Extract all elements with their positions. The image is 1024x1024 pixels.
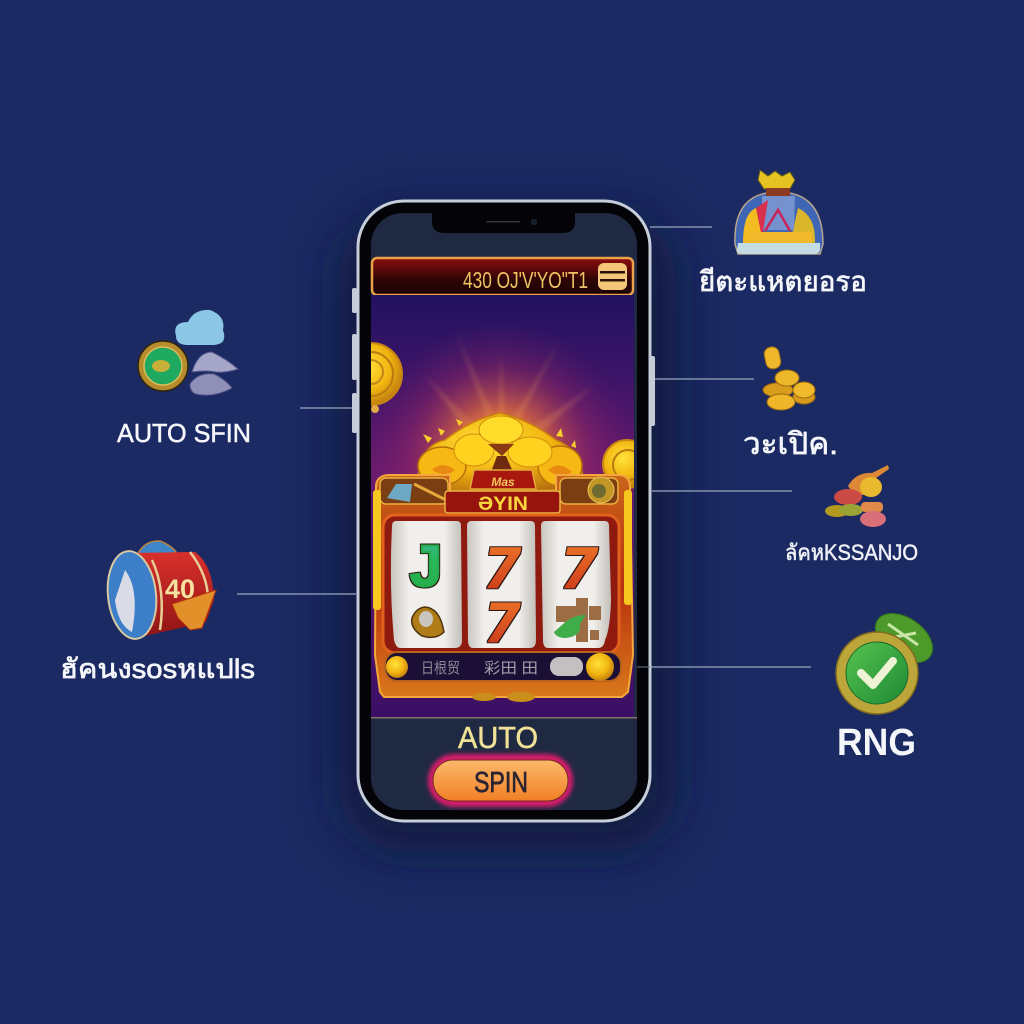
panel text right: 彩田 田	[484, 660, 538, 677]
feature: auto spin	[117, 310, 251, 448]
side buttons	[352, 288, 655, 433]
phone	[340, 201, 655, 821]
status bar text: 430 OJ'V'YO"T1	[463, 267, 588, 293]
label: วะเปิค.	[743, 428, 838, 461]
feature: coins	[743, 346, 838, 461]
seven: 7	[560, 537, 599, 602]
game area	[371, 295, 634, 717]
panel pill	[550, 657, 583, 676]
gold side trim	[373, 490, 632, 610]
light rays	[431, 344, 588, 430]
menu button	[598, 263, 627, 290]
feature: crown dome	[699, 170, 867, 297]
spin banner	[445, 491, 560, 513]
notch	[432, 210, 575, 233]
control panel	[385, 652, 621, 681]
icon: RNG check badge	[836, 603, 942, 714]
label: ยีตะแหตยอรอ	[699, 266, 867, 297]
auto label: AUTO	[458, 720, 538, 755]
crest right	[560, 477, 618, 504]
label: ลัคหKSSANJO	[785, 540, 918, 565]
speaker and camera	[486, 219, 537, 225]
connector lines	[237, 227, 811, 667]
rng connector over bezel	[637, 666, 650, 668]
base coins	[472, 692, 535, 702]
icon: red drum	[104, 541, 216, 641]
gold treasure pile	[418, 413, 583, 490]
bell symbol	[412, 607, 444, 637]
screen	[371, 213, 637, 810]
left coin	[371, 342, 403, 413]
banner lettering: Mas	[491, 475, 515, 489]
seven: 7	[483, 592, 521, 655]
icon: coin cloud and leaves	[138, 310, 238, 395]
right coin	[602, 439, 634, 489]
feature: macarons	[785, 465, 918, 565]
icon: macaron stack	[825, 465, 889, 527]
feature: RNG	[836, 603, 942, 764]
spin button	[428, 754, 573, 807]
phone body	[358, 201, 650, 821]
spin banner text: ƏYIN	[478, 494, 528, 515]
crest left	[380, 478, 448, 504]
panel coin right	[586, 653, 614, 681]
label: AUTO SFIN	[117, 418, 251, 448]
top status bar	[372, 258, 633, 295]
reel 2	[467, 521, 536, 655]
label: ฮัคนงsosหแปls	[60, 654, 255, 684]
glow	[386, 332, 614, 474]
wild symbol	[554, 598, 601, 642]
phone shadow	[340, 215, 675, 850]
spin button text: SPIN	[474, 767, 528, 799]
J symbol: J	[410, 534, 442, 599]
seven: 7	[483, 537, 522, 602]
icon: crown dome	[735, 170, 823, 254]
feature: red drum	[60, 541, 255, 684]
icon: coin stack	[763, 346, 815, 410]
reel 1	[391, 521, 462, 648]
label: RNG	[837, 722, 916, 764]
reel window	[383, 515, 619, 653]
reel 3	[541, 521, 611, 648]
upper banner	[470, 470, 536, 489]
game background	[371, 295, 634, 717]
drum number: 40	[165, 574, 195, 604]
game bottom border	[371, 717, 637, 718]
slot machine cabinet	[373, 470, 633, 702]
panel coin left	[386, 656, 408, 678]
panel text left: 日根贸	[421, 660, 460, 677]
